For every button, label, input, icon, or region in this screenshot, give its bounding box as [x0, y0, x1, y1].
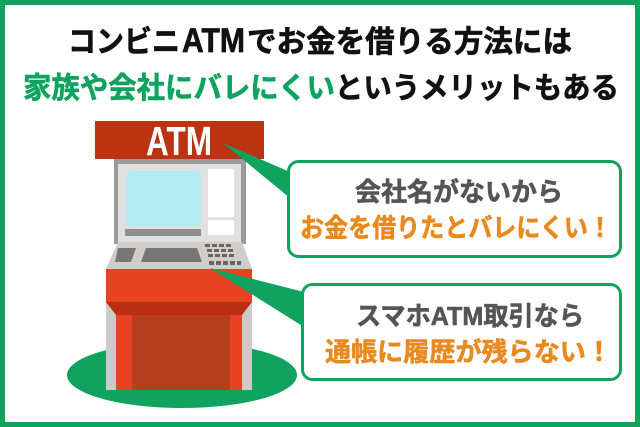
door [132, 315, 230, 390]
ATM machine [106, 159, 252, 390]
green ellipse floor [67, 342, 297, 408]
callout 2 box [302, 284, 620, 380]
callout 2 [210, 268, 620, 380]
callout 1 line 1: 会社名がないから [355, 177, 563, 207]
callout 2 pointer [210, 268, 304, 327]
grey lower body [106, 300, 252, 390]
title [23, 22, 619, 105]
white panels [208, 169, 234, 217]
sign text: ATM [146, 118, 212, 164]
title line 1 [68, 22, 572, 60]
title line 1: でお金を借りる方法には [247, 26, 572, 59]
callout 1 pointer [223, 143, 290, 198]
screen [126, 171, 201, 226]
callout 2 line 1: スマホATM取引なら [356, 301, 584, 331]
keyboard shelf [106, 242, 252, 269]
red counter [106, 269, 252, 302]
title line 2: 家族や会社にバレにくいというメリットもある [23, 72, 619, 105]
red door frame [116, 315, 242, 390]
card slot bar [125, 229, 201, 236]
keypad [205, 244, 241, 265]
callout 1 line 2: お金を借りたとバレにくい！ [300, 213, 612, 243]
machine upper body [114, 159, 246, 244]
title line 1: ATM [182, 22, 245, 60]
callout 1 [223, 143, 620, 256]
dark red band [106, 302, 252, 315]
callout 1 box [288, 162, 620, 256]
callout 2 line 2: 通帳に履歴が残らない！ [325, 337, 612, 367]
ATM sign [95, 118, 264, 164]
title line 1: コンビニ [68, 26, 180, 59]
